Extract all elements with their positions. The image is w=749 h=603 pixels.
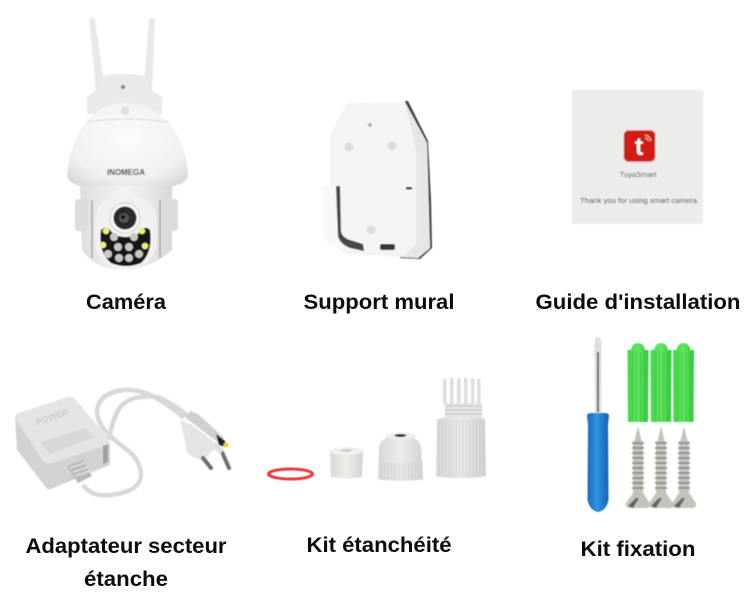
- short seal cylinder: [330, 447, 363, 478]
- label: Guide d'installation: Guide d'installation: [536, 291, 740, 314]
- wall mount holes: [344, 123, 396, 234]
- camera lower body: [80, 186, 172, 270]
- fixing kit product photo: [587, 337, 696, 512]
- camera dome: [67, 103, 188, 188]
- wall mount hook: [323, 186, 366, 250]
- label: Caméra: Caméra: [86, 291, 166, 314]
- camera antennas: [89, 18, 155, 112]
- power adapter product photo: [15, 390, 229, 495]
- adapter box: POWER: [34, 407, 70, 427]
- label: Adaptateur secteur étanche: [26, 535, 226, 591]
- green wall anchors: [628, 343, 694, 422]
- camera brand label: INOMEGA: [107, 167, 145, 177]
- wall mount side edge: [400, 101, 432, 259]
- adapter box: [15, 397, 110, 490]
- guide cover: [572, 90, 703, 224]
- red O-ring: [268, 469, 312, 479]
- label: Kit étanchéité: Kit étanchéité: [306, 534, 452, 557]
- adapter cable loop: [83, 390, 190, 495]
- wall mount plate: [330, 102, 430, 258]
- label: Adaptateur secteur étanche: Adaptateur secteur: [26, 535, 226, 558]
- label: Kit fixation: Kit fixation: [580, 538, 696, 561]
- camera head: [95, 196, 157, 269]
- Tuya logo: t: [635, 133, 644, 161]
- cone nut: [378, 432, 423, 481]
- adapter EU plug: [180, 420, 229, 468]
- screwdriver: [587, 337, 609, 512]
- camera lens: [110, 203, 140, 233]
- camera product photo: [67, 18, 188, 270]
- threaded gland: [436, 378, 486, 478]
- adapter DC plug: [186, 411, 228, 448]
- installation guide booklet: [572, 90, 703, 224]
- label: Adaptateur secteur étanche: étanche: [84, 568, 168, 591]
- camera LED panel: [100, 228, 151, 266]
- waterproof kit product photo: [268, 378, 486, 481]
- guide thank-you line: Thank you for using smart camera: [580, 196, 698, 205]
- metal screws: [626, 426, 696, 508]
- adapter cable strain relief: [67, 460, 92, 483]
- wall mount product photo: [323, 101, 432, 259]
- camera wall bracket: [87, 74, 162, 114]
- label: Support mural: Support mural: [304, 291, 454, 314]
- guide app name: TuyaSmart: [620, 170, 657, 179]
